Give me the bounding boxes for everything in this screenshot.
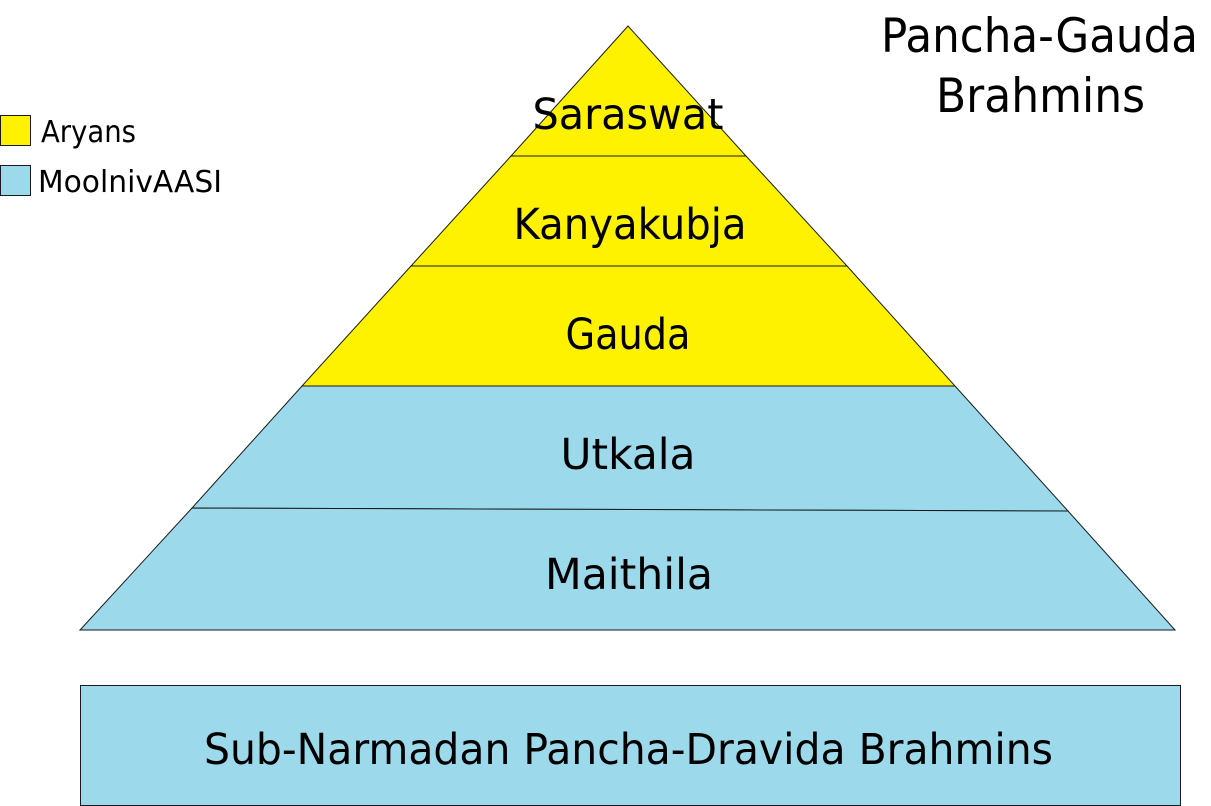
tier: Gauda xyxy=(302,266,955,386)
tier: Maithila xyxy=(80,508,1175,630)
title: Brahmins xyxy=(936,69,1145,124)
tier: Maithila: Maithila xyxy=(545,550,713,600)
legend item: MoolnivAASI: MoolnivAASI xyxy=(38,165,222,200)
title xyxy=(881,9,1198,124)
tier: Gauda: Gauda xyxy=(566,310,690,360)
tier: Saraswat xyxy=(511,26,746,156)
base panel: Sub-Narmadan Pancha-Dravida Brahmins: Sub-Narmadan Pancha-Dravida Brahmins xyxy=(204,725,1053,775)
legend item: Aryans: Aryans xyxy=(41,115,136,150)
pyramid xyxy=(80,26,1175,630)
tier: Utkala: Utkala xyxy=(560,430,696,480)
legend item: Aryans xyxy=(0,115,136,150)
tier: Saraswat: Saraswat xyxy=(532,90,724,140)
tier: Kanyakubja: Kanyakubja xyxy=(514,200,746,250)
legend xyxy=(0,115,222,200)
tier: Kanyakubja xyxy=(411,156,847,266)
base panel: Sub-Narmadan Pancha-Dravida Brahmins xyxy=(80,686,1180,806)
tier: Utkala xyxy=(192,386,1068,511)
